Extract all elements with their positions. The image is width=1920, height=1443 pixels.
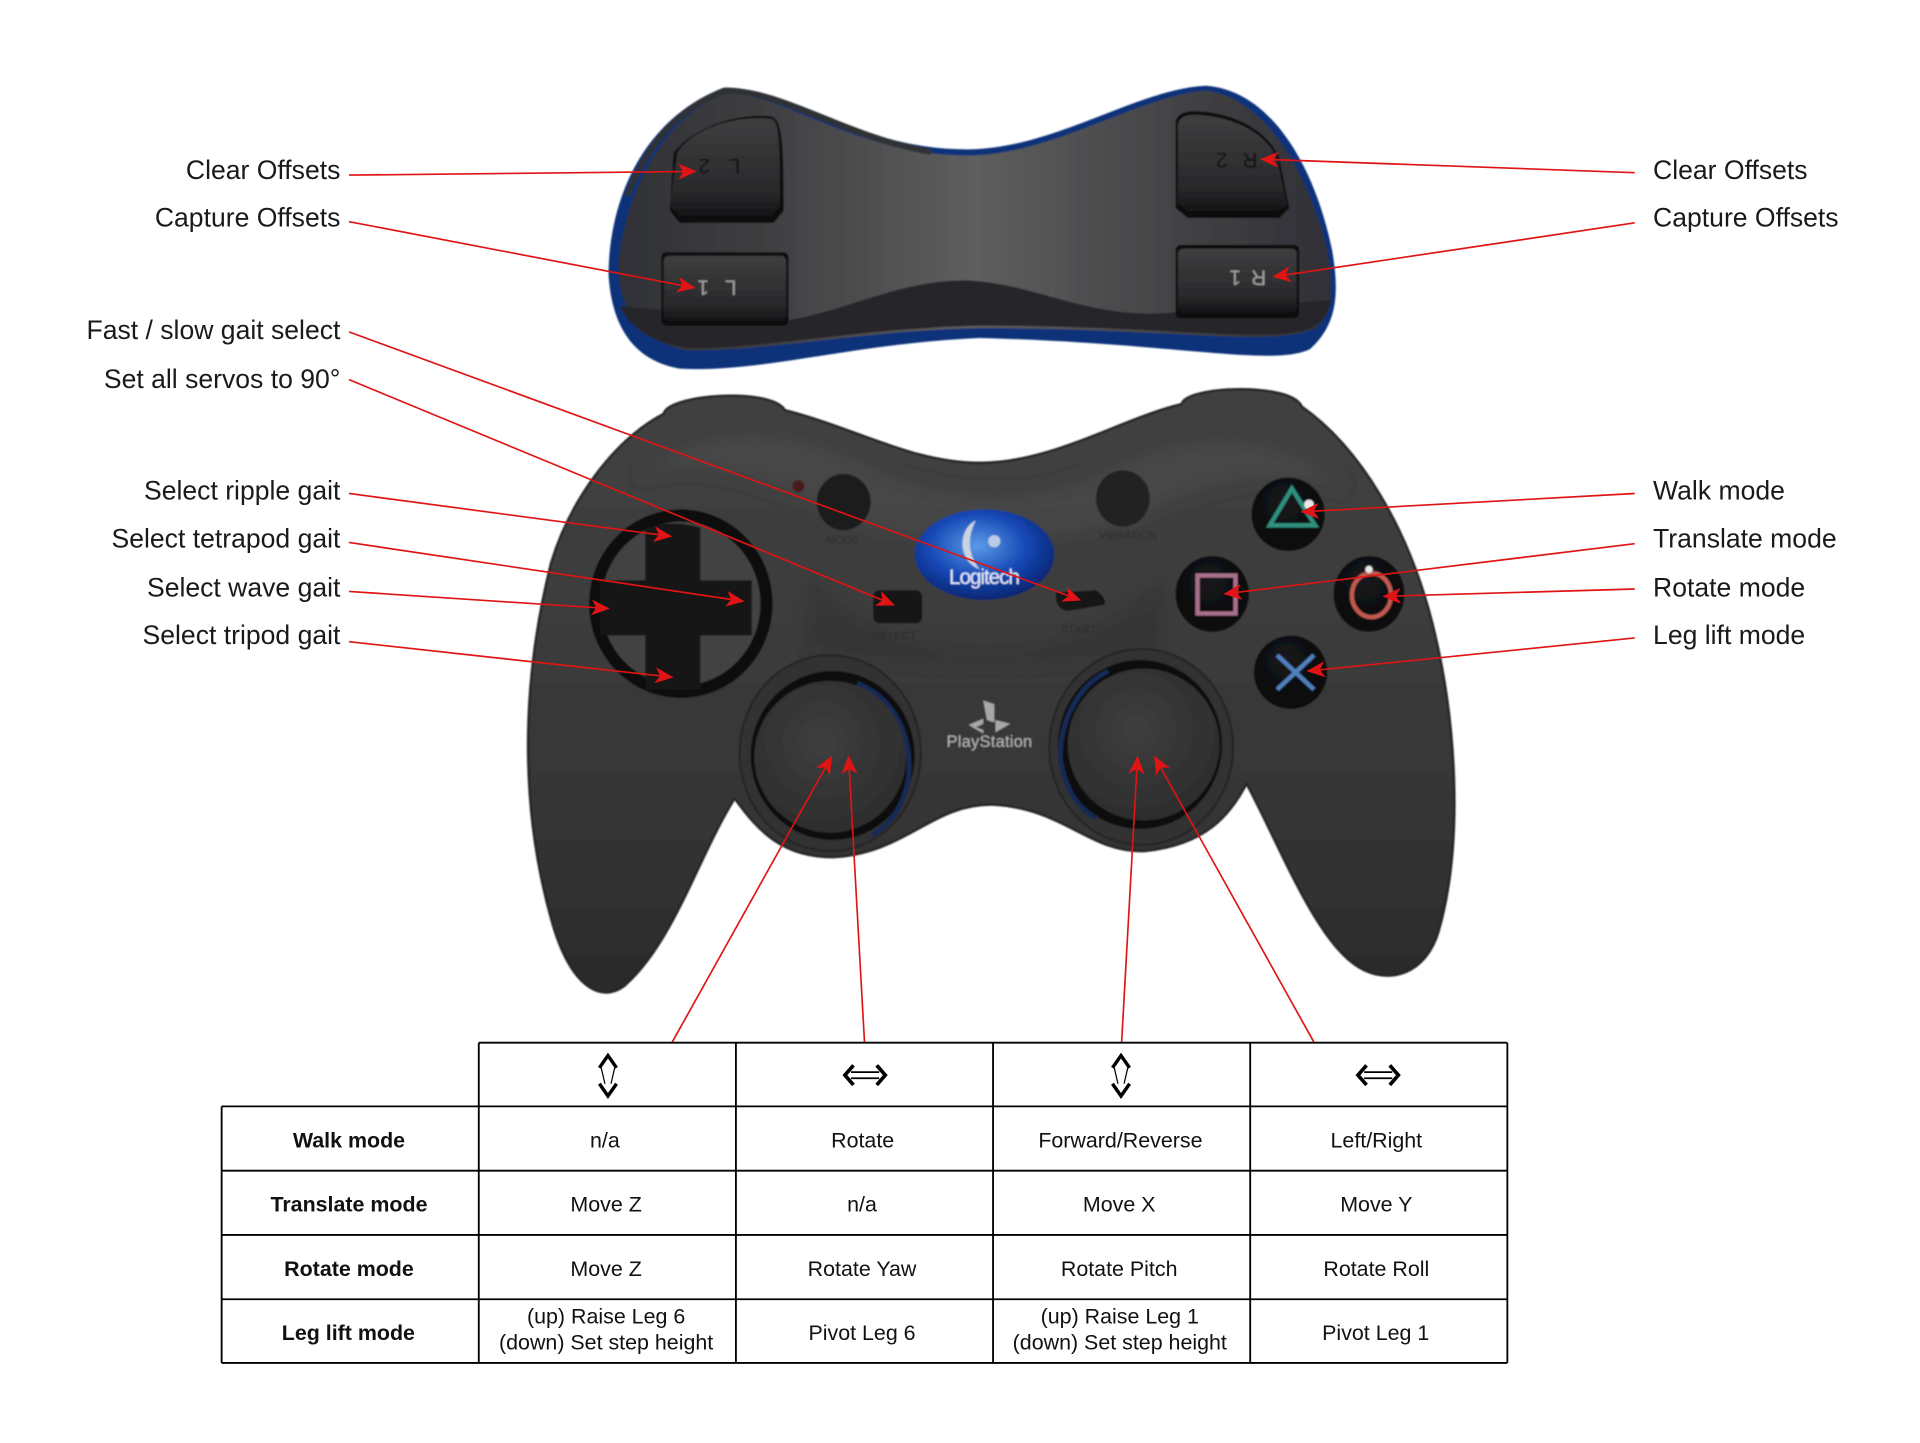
photo: controller front: [528, 389, 1454, 992]
controller body: [528, 389, 1454, 992]
arrow: table to left stick vertical: [672, 757, 831, 1042]
button: R1: [1176, 245, 1299, 318]
label: Clear Offsets left: Clear Offsets: [186, 155, 340, 185]
label: Set all servos to 90: Set all servos to 90°: [104, 364, 340, 394]
bumper lower band: [620, 280, 1331, 348]
arrow: walk mode to triangle: [1302, 493, 1635, 512]
icon: vertical arrow column 3: [1112, 1056, 1130, 1096]
row: Leg lift mode: (up) Raise Leg 6: [527, 1305, 685, 1329]
right analog stick: [1049, 649, 1233, 845]
bumper plate: [618, 91, 1331, 350]
arrow: translate mode to square: [1224, 544, 1635, 594]
row: Rotate mode: [284, 1257, 1429, 1281]
label: Leg lift mode: Leg lift mode: [1653, 620, 1805, 650]
row: Walk mode: Walk mode: [293, 1128, 405, 1152]
select button: SELECT: [874, 630, 917, 642]
vibration button: VIBRATION: [1098, 530, 1157, 542]
vibration button: [1096, 470, 1157, 542]
row: Translate mode: Move Y: [1340, 1193, 1412, 1217]
arrow: rotate mode to circle: [1384, 589, 1635, 596]
button: R1: R1: [1229, 266, 1266, 289]
button: R2: [1176, 111, 1289, 218]
d-pad cross: [600, 523, 752, 689]
row: Leg lift mode: (down) Set step height: [1013, 1330, 1227, 1354]
arrow: clear offsets to R2: [1261, 159, 1635, 173]
icon: horizontal arrow column 2: [845, 1065, 885, 1085]
label: Capture Offsets left: Capture Offsets: [155, 203, 340, 233]
PlayStation logo: [947, 700, 1032, 751]
button: L1: [661, 252, 789, 326]
label: Rotate mode: Rotate mode: [1653, 572, 1805, 602]
row: Leg lift mode: (up) Raise Leg 1: [1041, 1305, 1199, 1329]
row: Translate mode: [270, 1193, 1412, 1217]
label: Translate mode: Translate mode: [1653, 523, 1837, 553]
row: Rotate mode: Rotate Roll: [1323, 1257, 1429, 1281]
row: Leg lift mode: [282, 1305, 1429, 1354]
row: Rotate mode: Rotate Pitch: [1061, 1257, 1177, 1281]
d-pad well: [589, 509, 773, 698]
icon: vertical arrow column 1: [599, 1056, 617, 1096]
arrow: capture offsets to R1: [1273, 223, 1635, 277]
row: Translate mode: Translate mode: [270, 1193, 428, 1217]
bumper grey top-left rim: [627, 91, 931, 196]
label: Select tripod gait: Select tripod gait: [143, 620, 341, 650]
arrow: leg lift mode to cross: [1308, 638, 1635, 671]
arrow: clear offsets to L2: [349, 171, 696, 175]
arrow: capture offsets to L1: [349, 222, 694, 288]
row: Leg lift mode: (down) Set step height: [499, 1330, 713, 1354]
row: Translate mode: n/a: [847, 1193, 877, 1217]
button: L2: [670, 116, 784, 223]
arrow: wave gait to d-pad left: [349, 591, 609, 609]
Logitech badge: Logitech: [949, 566, 1020, 589]
row: Walk mode: Left/Right: [1331, 1128, 1422, 1152]
Logitech badge: [915, 509, 1054, 600]
row: Leg lift mode: Pivot Leg 1: [1322, 1321, 1429, 1345]
photo: controller top edge with shoulder buttons: [609, 86, 1336, 369]
row: Walk mode: Rotate: [831, 1128, 894, 1152]
button: L1: L1: [697, 275, 737, 298]
start button: [1056, 590, 1105, 636]
row: Translate mode: Move Z: [570, 1193, 642, 1217]
body highlight: shoulder arc: [637, 435, 1347, 542]
arrow: fast / slow gait to start: [349, 332, 1080, 600]
button: circle: [1333, 556, 1404, 632]
row: Walk mode: n/a: [590, 1128, 620, 1152]
label: Select ripple gait: Select ripple gait: [144, 476, 341, 506]
button: R2: R2: [1216, 148, 1258, 171]
button: L2: L2: [699, 154, 740, 177]
table: stick functions per mode: [222, 1043, 1507, 1363]
button: cross: [1254, 636, 1327, 709]
button: square: [1176, 556, 1249, 632]
mode button and LED: [792, 474, 871, 547]
button: triangle: [1251, 478, 1325, 551]
arrow: set servos to select: [349, 380, 894, 605]
bumper shadow rim: [609, 86, 1336, 369]
select button: [873, 590, 922, 642]
left analog stick: [740, 655, 921, 851]
start button: START: [1061, 624, 1097, 636]
icon: horizontal arrow column 4: [1358, 1065, 1398, 1085]
row: Leg lift mode: Leg lift mode: [282, 1321, 415, 1345]
row: Rotate mode: Rotate mode: [284, 1257, 414, 1281]
label: Clear Offsets right: Clear Offsets: [1653, 155, 1808, 185]
label: Select tetrapod gait: Select tetrapod gait: [112, 523, 341, 553]
label: Capture Offsets right: Capture Offsets: [1653, 203, 1839, 233]
label: Walk mode: Walk mode: [1653, 476, 1785, 506]
row: Walk mode: Forward/Reverse: [1038, 1128, 1202, 1152]
body shading: centre panel: [808, 576, 1163, 663]
row: Leg lift mode: Pivot Leg 6: [808, 1321, 916, 1345]
row: Walk mode: [293, 1128, 1422, 1152]
arrow: table to right stick horizontal: [1155, 757, 1314, 1042]
arrow: table to left stick horizontal: [849, 757, 864, 1042]
row: Translate mode: Move X: [1083, 1193, 1155, 1217]
mode button and LED: MODE: [826, 535, 859, 547]
label: Select wave gait: Select wave gait: [147, 572, 341, 602]
PlayStation logo: PlayStation: [947, 732, 1032, 751]
row: Rotate mode: Move Z: [570, 1257, 642, 1281]
arrow: ripple gait to d-pad up: [349, 493, 671, 536]
arrow: table to right stick vertical: [1122, 757, 1138, 1042]
arrow: tripod gait to d-pad down: [349, 642, 672, 677]
row: Rotate mode: Rotate Yaw: [808, 1257, 917, 1281]
label: Fast / slow gait select: Fast / slow gait select: [86, 315, 341, 345]
arrow: tetrapod gait to d-pad right: [349, 542, 743, 601]
